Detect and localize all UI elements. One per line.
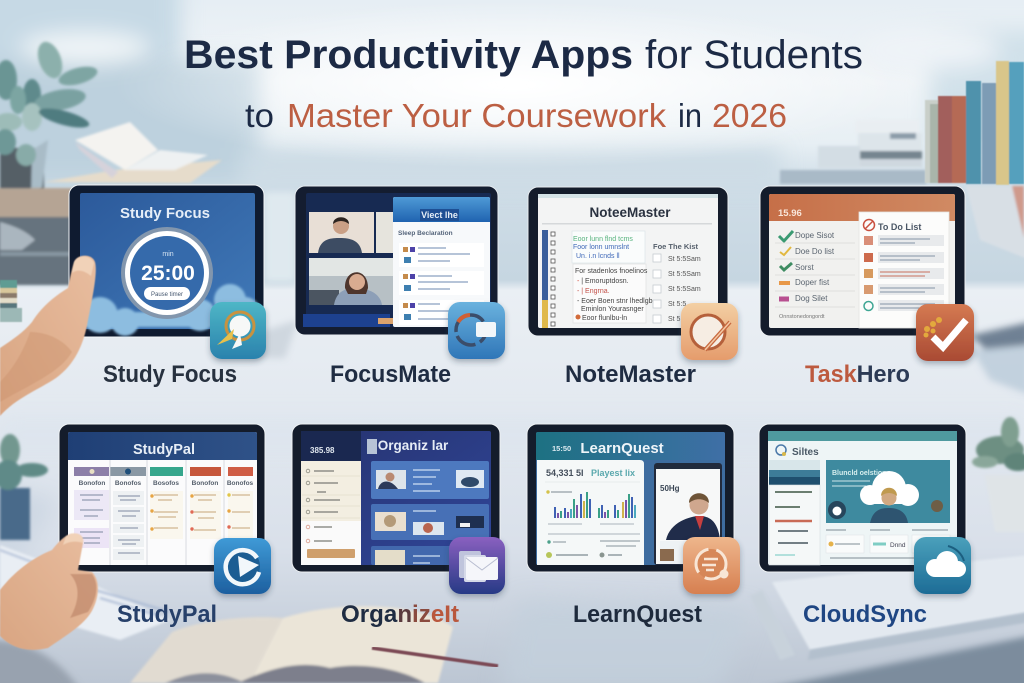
- tablet: StudyPal: [59, 424, 265, 572]
- checklist: [653, 242, 701, 323]
- label: CloudSync: CloudSync: [803, 601, 927, 628]
- lined paper lower left: [0, 545, 170, 640]
- handwritten notes: - | Emoruptdosn.: [577, 278, 629, 285]
- title: [184, 33, 863, 134]
- screen title: Study Focus: [120, 205, 210, 222]
- clouds on screen: [82, 284, 260, 336]
- tablet: OrganizeIt: [292, 424, 500, 572]
- left column: [769, 460, 820, 565]
- small book stack top right: [780, 120, 926, 184]
- hero banner: [826, 460, 950, 523]
- handwritten notes: Eoor flunlbu-ln: [582, 315, 627, 322]
- screen title: Siltes: [792, 447, 819, 458]
- checklist: St 5:5Sam: [668, 286, 701, 293]
- tablet: TaskHero: [760, 186, 965, 336]
- app icon: CloudSync: [914, 537, 971, 594]
- wooden desk and dark shelf, left: [0, 188, 72, 285]
- handwritten notes: For stadenlos fnoelinos: [575, 268, 648, 275]
- task rows: Dope Sisot: [795, 231, 835, 240]
- bottom cards: Dnnd: [890, 542, 906, 549]
- label: NoteMaster: NoteMaster: [565, 361, 696, 388]
- tablet: OrganizeIt: 385.98: [310, 446, 335, 455]
- title: Best Productivity Apps: [184, 33, 633, 77]
- app icon: FocusMate: [448, 302, 505, 359]
- tablet: LearnQuest: LearnQuest: [580, 440, 664, 457]
- plant lower left: [0, 434, 48, 540]
- video tile 1: [309, 212, 393, 253]
- label: StudyPal: StudyPal: [117, 601, 217, 628]
- book row top right: [925, 61, 1024, 185]
- app icon: TaskHero: [916, 304, 974, 361]
- task rows: [775, 231, 855, 320]
- bottom-left sleeve: [0, 640, 80, 683]
- tablet: LearnQuest: 15:50: [552, 444, 571, 453]
- pen: [372, 648, 498, 666]
- side panel: Viect lhe: [421, 210, 458, 220]
- app icon: OrganizeIt: [449, 537, 505, 594]
- tablet: Study Focus: [69, 185, 264, 337]
- tablet: LearnQuest: [527, 424, 734, 572]
- bottom bar: [303, 314, 393, 327]
- timer dial: min: [162, 251, 174, 258]
- hero banner: Bluncld oelstion: [832, 470, 886, 477]
- checklist: Foe The Kist: [653, 242, 699, 251]
- plant and pot lower right: [972, 417, 1024, 532]
- title: in: [678, 97, 702, 134]
- column names: [79, 480, 254, 487]
- timer dial: 25:00: [141, 262, 195, 285]
- analytics panel: Playest lix: [591, 468, 635, 478]
- binder clipboard bottom right: [750, 555, 1024, 683]
- app icon: LearnQuest: [683, 537, 740, 594]
- side panel: Sleep Beclaration: [398, 230, 453, 237]
- column headers: [74, 467, 253, 476]
- tablet: TaskHero: 15.96: [778, 208, 802, 219]
- plant and pot top left: [0, 38, 99, 198]
- side panel: [393, 197, 490, 327]
- sidebar: [542, 230, 555, 328]
- timer dial: [121, 227, 213, 319]
- column names: Bonofon: [192, 480, 218, 487]
- phone card with presenter: 50Hg: [660, 484, 680, 493]
- video tile 2: [309, 258, 393, 305]
- app icon: Study Focus: [210, 302, 266, 359]
- phone card with presenter: [654, 463, 722, 565]
- task rows: Sorst: [795, 263, 814, 272]
- tablet: FocusMate: [295, 186, 498, 335]
- tablet: StudyPal: StudyPal: [133, 442, 195, 458]
- kanban cards: [74, 460, 253, 565]
- to do list panel: To Do List: [878, 222, 921, 232]
- open book and pencil right edge: [966, 186, 1024, 260]
- handwritten notes: - | Engrna.: [577, 288, 610, 295]
- handwritten notes: Foor lonn umnslnt: [573, 244, 629, 251]
- task rows: Doper fist: [795, 278, 830, 287]
- label: Study Focus: Study Focus: [103, 361, 237, 388]
- handwritten notes: Un. i.n lcnds ll: [576, 253, 620, 260]
- open textbook at bottom centre: [130, 606, 453, 683]
- app icon: NoteMaster: [681, 303, 738, 360]
- title: 2026: [712, 97, 787, 134]
- checklist: St 5: [668, 316, 681, 323]
- bottom cards: [826, 530, 950, 558]
- sidebar: [301, 461, 361, 565]
- content cards: [371, 461, 489, 565]
- screen title: Organiz lar: [378, 438, 449, 453]
- screen title: [776, 445, 819, 458]
- handwritten notes: - Eoer Boen stnr lhedlgb: [577, 298, 653, 305]
- bar chart: [554, 492, 636, 518]
- tablet: CloudSync: [759, 424, 966, 572]
- analytics panel: 54,331 5I: [546, 468, 584, 478]
- hand holding tablet, bottom left: [0, 533, 98, 650]
- stacked books left: [0, 280, 22, 322]
- column names: Bonofos: [227, 480, 254, 487]
- task rows: Onnstonedongordt: [779, 314, 825, 320]
- column names: Bonofon: [79, 480, 105, 487]
- handwritten notes: Eoor lunn flnd tcms: [573, 236, 633, 243]
- handwritten notes: Eminlon Yourasnger: [581, 306, 644, 313]
- tablet: NoteMaster: [528, 187, 728, 336]
- checklist: St 5:5Sam: [668, 271, 701, 278]
- app icon: StudyPal: [214, 538, 271, 594]
- screen title: NoteeMaster: [589, 205, 671, 220]
- task rows: Doe Do list: [795, 247, 835, 256]
- task rows: Dog Silet: [795, 294, 828, 303]
- title: for Students: [645, 33, 863, 77]
- hand holding tablet, top left: [0, 256, 96, 416]
- label: LearnQuest: LearnQuest: [573, 601, 702, 628]
- title: Master Your Coursework: [287, 97, 667, 134]
- open book on shelf top left: [44, 122, 222, 183]
- checklist: St 5:5Sam: [668, 256, 701, 263]
- window column behind tablets: [265, 192, 295, 282]
- label: TaskHero: TaskHero: [805, 361, 910, 388]
- table surface patches: [215, 320, 1024, 395]
- title: to: [245, 97, 274, 134]
- label: FocusMate: FocusMate: [330, 361, 451, 388]
- column names: Bonofos: [115, 480, 142, 487]
- handwritten notes: [572, 231, 653, 323]
- analytics panel: [537, 460, 644, 565]
- to do list panel: [859, 212, 949, 328]
- label: OrganizeIt: OrganizeIt: [341, 601, 459, 628]
- timer dial: Pause timer: [151, 292, 183, 298]
- checklist: St 5:5: [668, 301, 686, 308]
- column names: Bosofos: [153, 480, 179, 487]
